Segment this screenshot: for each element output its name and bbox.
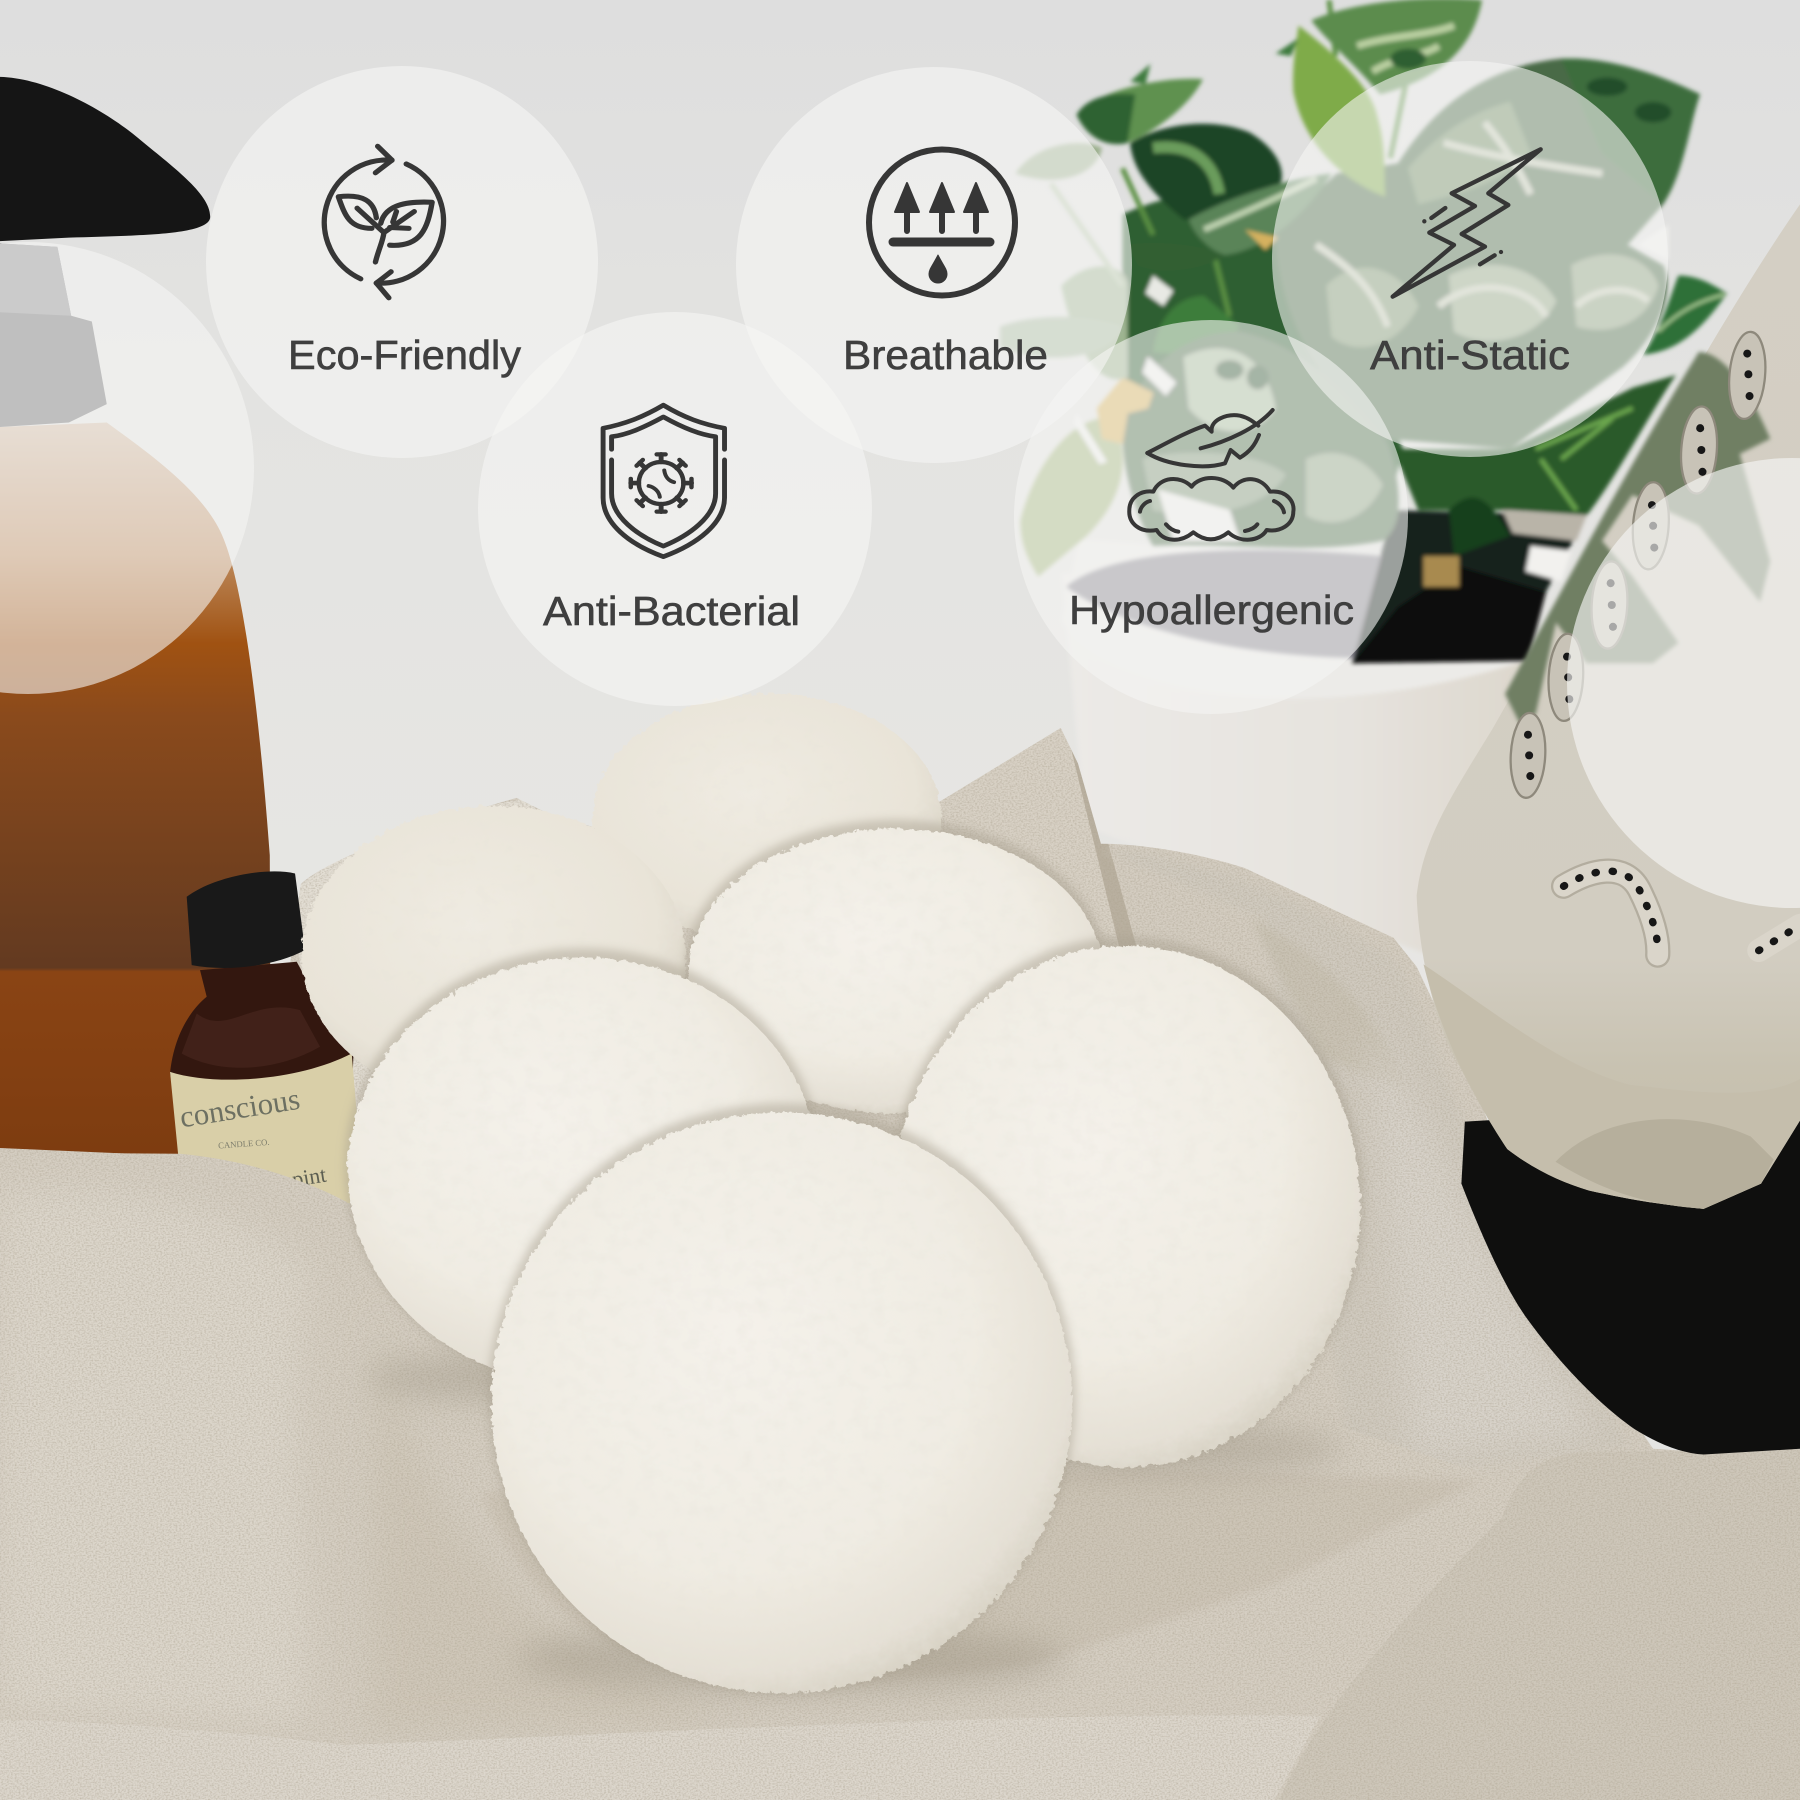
iron reflections xyxy=(1505,352,1770,724)
iron xyxy=(1417,204,1800,1455)
ball front xyxy=(488,1103,1076,1693)
essential oil bottle: CANDLE CO. xyxy=(218,1137,270,1150)
back cloth xyxy=(0,728,1681,1481)
label: Hypoallergenic: Hypoallergenic xyxy=(1069,587,1354,633)
label: Anti-Static: Anti-Static xyxy=(1370,332,1570,378)
icon: feather and cloud xyxy=(1129,410,1294,540)
panel: Anti-Static xyxy=(1272,61,1668,457)
label: Breathable: Breathable xyxy=(843,332,1048,378)
essential oil bottle: pint xyxy=(290,1162,328,1192)
essential oil bottle xyxy=(170,871,358,1203)
decorative circle: iron overlay xyxy=(1567,458,1800,908)
plant xyxy=(1000,0,1727,663)
decorative circle: bottle overlay xyxy=(0,242,254,694)
plant pot xyxy=(1062,540,1544,953)
ball back left xyxy=(302,806,685,1104)
iron steam holes xyxy=(1509,330,1800,955)
ball middle xyxy=(685,820,1106,1114)
wool dryer balls xyxy=(302,693,1364,1693)
essential oil bottle: conscious xyxy=(177,1082,302,1134)
ball right xyxy=(889,937,1364,1467)
panel: Eco-Friendly xyxy=(206,66,598,458)
label: Eco-Friendly: Eco-Friendly xyxy=(288,332,522,378)
panel: Breathable xyxy=(736,67,1132,463)
icon: breathable membrane xyxy=(869,150,1015,296)
ball left xyxy=(344,948,822,1384)
plant centre mass xyxy=(1122,192,1403,536)
stems xyxy=(1122,0,1406,316)
panel: Anti-Bacterial xyxy=(478,312,872,706)
label: Anti-Bacterial: Anti-Bacterial xyxy=(543,588,800,634)
front cloth xyxy=(0,1153,1800,1800)
ball shadows xyxy=(367,1355,1343,1693)
wall xyxy=(0,0,1800,1100)
icon: shield with bacteria xyxy=(603,405,725,557)
ball back xyxy=(592,693,941,941)
icon: lightning bolt xyxy=(1393,149,1541,297)
panel: Hypoallergenic xyxy=(1014,320,1408,714)
spray bottle xyxy=(0,77,271,1159)
pot interior xyxy=(1066,550,1383,658)
icon: leaf with recycling arrows xyxy=(324,146,444,298)
